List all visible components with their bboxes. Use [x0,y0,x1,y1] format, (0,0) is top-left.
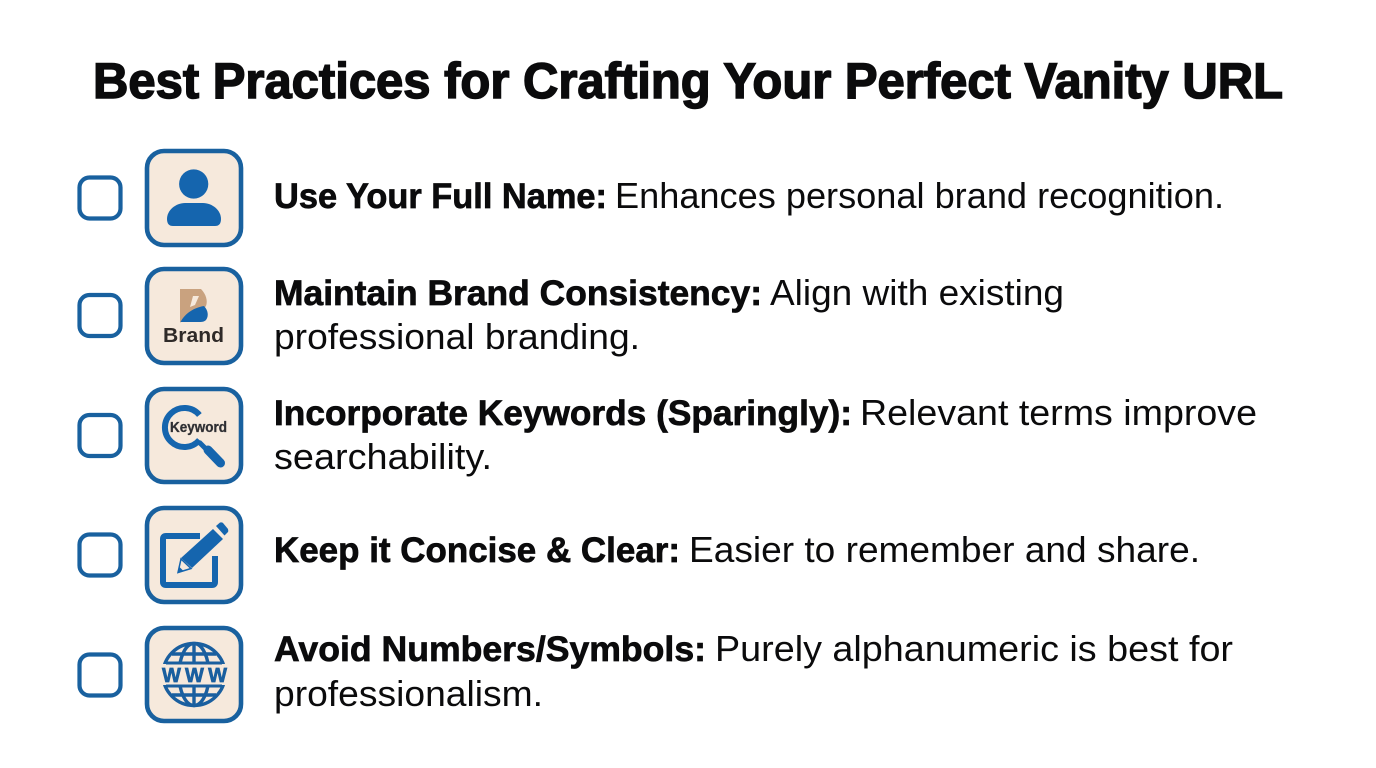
panel: use your full name [80,151,1224,245]
checkbox 4 [80,534,120,576]
text: avoid numbers and symbols: professionalism. [274,673,543,714]
checkbox 5 [80,654,120,696]
text: incorporate keywords: searchability. [274,436,492,477]
icon box: edit pencil [147,508,241,602]
icon box: keyword search: Keyword [170,419,227,436]
text: avoid numbers and symbols: Purely alphanumeric is best for [715,628,1233,669]
panel: avoid numbers and symbols [80,628,1233,721]
text: avoid numbers and symbols: Avoid Numbers/Symbols: [274,630,706,669]
panel: maintain brand consistency [80,269,1064,363]
panel: incorporate keywords [80,389,1257,482]
checkbox 2 [80,295,120,336]
icon box: person [147,151,241,245]
text: maintain brand consistency: professional branding. [274,316,640,357]
text: use your full name [274,175,1224,216]
text: maintain brand consistency: Maintain Brand Consistency: [274,274,762,313]
text: use your full name: Enhances personal brand recognition. [615,175,1224,216]
text: keep it concise [274,529,1200,570]
title: Best Practices for Crafting Your Perfect Vanity URL [93,53,1283,109]
text: avoid numbers and symbols [274,628,1233,714]
text: keep it concise: Easier to remember and share. [689,529,1200,570]
text: keep it concise: Keep it Concise & Clear: [274,531,680,570]
text: incorporate keywords [274,392,1257,477]
text: incorporate keywords: Relevant terms improve [860,392,1257,433]
checkbox 1 [80,178,120,218]
text: maintain brand consistency [274,272,1064,357]
icon box: brand [147,269,241,363]
text: use your full name: Use Your Full Name: [274,177,607,216]
icon box: keyword search [147,389,241,482]
icon box: www globe [147,628,241,721]
text: incorporate keywords: Incorporate Keywords (Sparingly): [274,394,852,433]
text: maintain brand consistency: Align with existing [770,272,1064,313]
checkbox 3 [80,415,120,456]
panel: keep it concise [80,508,1200,602]
icon box: www globe: WWW [162,665,227,687]
icon box: brand: Brand [163,324,224,347]
